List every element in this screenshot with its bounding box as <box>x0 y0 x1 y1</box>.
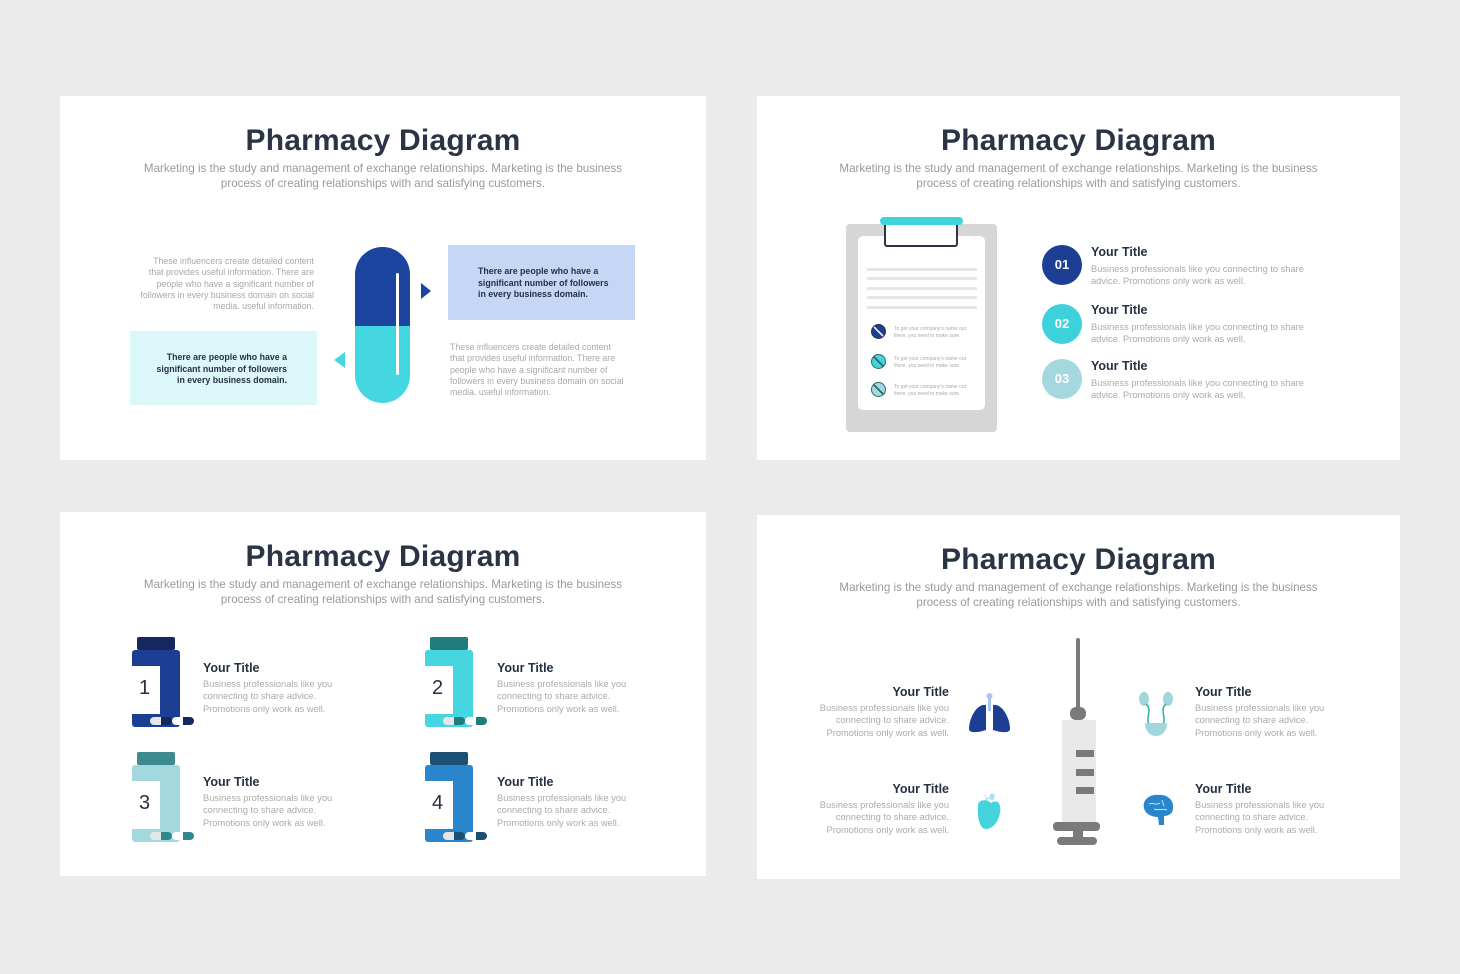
icon: clipboard: there, you need to make sure. <box>894 362 960 368</box>
callout: right blue box <box>448 245 635 320</box>
text block: right gray: people who have a significant number of <box>450 365 607 375</box>
item 01: 01 <box>1055 257 1069 272</box>
subtitle: process of creating relationships with and satisfying customers. <box>221 592 545 606</box>
bottle 4: Your Title <box>497 775 554 789</box>
callout: left cyan box <box>130 331 317 405</box>
icon: syringe <box>1053 638 1100 845</box>
callout: right blue box: There are people who have a <box>478 266 598 276</box>
item 03: Your Title <box>1091 359 1148 373</box>
icon: kidneys <box>1139 692 1173 736</box>
text: bottom-right item <box>1195 782 1324 835</box>
subtitle <box>839 162 1318 190</box>
callout: left cyan box: There are people who have a <box>167 352 287 362</box>
icon: brain <box>1144 794 1174 825</box>
text block: left gray: that provides useful information. There are <box>149 267 314 277</box>
bottle 4: Business professionals like you connecting to share advice. Promotions only work as well. <box>497 793 626 828</box>
subtitle <box>839 581 1318 608</box>
subtitle: process of creating relationships with and satisfying customers. <box>916 596 1241 608</box>
icon: clipboard: To get your company's name out <box>894 326 966 332</box>
bottle 3: Business professionals like you connecting to share advice. Promotions only work as well. <box>203 793 332 828</box>
callout: left cyan box: in every business domain. <box>177 375 287 385</box>
icon: clipboard: To get your company's name out <box>894 356 966 362</box>
subtitle: Marketing is the study and management of exchange relationships. Marketing is the business <box>839 581 1318 594</box>
subtitle: Marketing is the study and management of exchange relationships. Marketing is the business <box>144 162 622 175</box>
subtitle <box>144 578 622 606</box>
text block: left gray: people who have a significant number of <box>157 279 314 289</box>
bottle 3: Your Title <box>203 775 260 789</box>
item 03: 03 <box>1055 371 1069 386</box>
bottle 3 <box>132 752 332 842</box>
icon: clipboard: there, you need to make sure. <box>894 332 960 338</box>
subtitle: process of creating relationships with and satisfying customers. <box>221 176 545 190</box>
item 02: Your Title <box>1091 303 1148 317</box>
panel: bottles <box>60 512 706 876</box>
text: top-left item: Your Title <box>892 685 949 699</box>
text: bottom-right item: Business professionals like you connecting to share advice. Promotions only work as well. <box>1195 800 1324 835</box>
subtitle: Marketing is the study and management of exchange relationships. Marketing is the business <box>839 162 1318 175</box>
text: top-right item <box>1195 685 1324 738</box>
item 01 <box>1042 245 1304 286</box>
subtitle: Marketing is the study and management of exchange relationships. Marketing is the business <box>144 578 622 591</box>
text block: left gray <box>140 256 314 311</box>
text: bottom-left item: Your Title <box>892 782 949 796</box>
text block: left gray: followers in every business domain on social <box>140 290 314 300</box>
text block: right gray: that provides useful information. There are <box>450 353 615 363</box>
item 03: Business professionals like you connecting to share advice. Promotions only work as well. <box>1091 378 1304 400</box>
text: bottom-left item: Business professionals like you connecting to share advice. Promotions only work as well. <box>820 800 949 835</box>
bottle 1: 1 <box>139 677 150 699</box>
item 01: Your Title <box>1091 245 1148 259</box>
bottle 1: Your Title <box>203 661 260 675</box>
callout: left cyan box: significant number of followers <box>156 364 287 374</box>
text block: left gray: media. useful information. <box>213 301 314 311</box>
bottle 2: 2 <box>432 677 443 699</box>
title: Pharmacy Diagram <box>941 124 1216 157</box>
item 03 <box>1042 359 1304 400</box>
text: bottom-left item <box>820 782 949 835</box>
bottle 2: Your Title <box>497 661 554 675</box>
bottle 1 <box>132 637 332 727</box>
title: Pharmacy Diagram <box>245 124 520 157</box>
bottle 2: Business professionals like you connecting to share advice. Promotions only work as well. <box>497 679 626 714</box>
item 02 <box>1042 303 1304 344</box>
text block: right gray: followers in every business domain on social <box>450 376 624 386</box>
item 02: 02 <box>1055 316 1069 331</box>
text block: right gray: media. useful information. <box>450 387 551 397</box>
title: Pharmacy Diagram <box>245 540 520 573</box>
text: top-right item: Business professionals like you connecting to share advice. Promotions only work as well. <box>1195 703 1324 738</box>
item 01: Business professionals like you connecting to share advice. Promotions only work as well. <box>1091 264 1304 286</box>
icon: capsule <box>355 247 410 403</box>
subtitle <box>144 162 622 190</box>
text block: right gray <box>450 342 624 397</box>
bottle 4: 4 <box>432 792 443 814</box>
arrow: left <box>334 352 345 368</box>
icon: clipboard <box>846 217 997 432</box>
text: top-left item: Business professionals like you connecting to share advice. Promotions only work as well. <box>820 703 949 738</box>
panel: clipboard list <box>757 96 1400 460</box>
text block: left gray: These influencers create detailed content <box>153 256 314 266</box>
panel: syringe organs <box>757 515 1400 879</box>
callout: right blue box: in every business domain. <box>478 289 588 299</box>
title: Pharmacy Diagram <box>941 543 1216 576</box>
text: bottom-right item: Your Title <box>1195 782 1252 796</box>
panel: pill diagram <box>60 96 706 460</box>
icon: clipboard: To get your company's name out <box>894 384 966 390</box>
text: top-left item <box>820 685 949 738</box>
icon: lungs <box>969 693 1010 732</box>
bottle 4 <box>425 752 626 842</box>
icon: clipboard: there, you need to make sure. <box>894 390 960 396</box>
callout: right blue box: significant number of followers <box>478 278 608 288</box>
arrow: right <box>421 283 431 299</box>
bottle 1: Business professionals like you connecting to share advice. Promotions only work as well. <box>203 679 332 714</box>
icon: heart <box>978 793 1000 829</box>
bottle 2 <box>425 637 626 727</box>
item 02: Business professionals like you connecting to share advice. Promotions only work as well. <box>1091 322 1304 344</box>
text block: right gray: These influencers create detailed content <box>450 342 611 352</box>
subtitle: process of creating relationships with and satisfying customers. <box>916 176 1241 190</box>
bottle 3: 3 <box>139 792 150 814</box>
text: top-right item: Your Title <box>1195 685 1252 699</box>
